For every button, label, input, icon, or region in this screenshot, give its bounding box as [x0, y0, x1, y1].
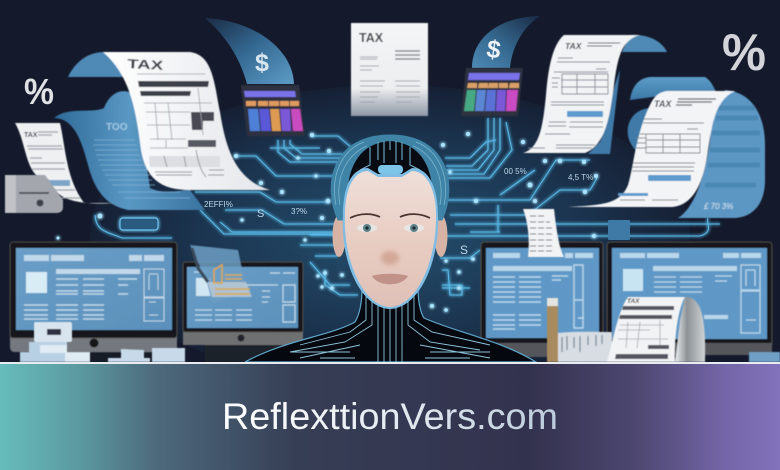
paper heading: TAX [654, 99, 672, 109]
circuit network [95, 118, 720, 295]
monitor camera dot [238, 334, 244, 342]
monitor frame [10, 242, 177, 338]
monitor base [607, 343, 772, 355]
top box [34, 322, 72, 342]
eye left [357, 224, 377, 232]
small blue chip [608, 220, 630, 240]
nose shadow [381, 251, 399, 265]
blue tail [622, 35, 667, 52]
lower boxes [20, 342, 89, 362]
ear left [332, 215, 346, 257]
document details [27, 132, 80, 198]
monitor content [24, 255, 164, 293]
ribbon shaded lines [93, 140, 190, 198]
receipt heading: TAX [627, 298, 640, 305]
calculator top keys [246, 101, 299, 106]
percent symbol left: % [24, 71, 54, 112]
right blue swoosh [472, 16, 540, 68]
right calculator [461, 68, 523, 116]
right lower scroll [568, 77, 765, 218]
paper heading: TAX [565, 41, 583, 51]
rear body bands [705, 108, 760, 185]
dollar icon left: $ [255, 49, 269, 77]
small circuit labels: 00 5% [504, 167, 527, 176]
monitor two [183, 262, 303, 362]
left floating report [190, 245, 252, 303]
monitor content [493, 253, 593, 271]
lips [372, 274, 408, 284]
small circuit labels: S [257, 208, 264, 220]
left calculator [241, 85, 305, 136]
circuit hair cap [331, 135, 449, 220]
face skin [345, 171, 436, 307]
calculator display [468, 73, 520, 80]
receipt lines [530, 216, 553, 251]
document lines [360, 57, 420, 102]
blue rear body [678, 90, 765, 218]
crumpled paper [558, 332, 612, 362]
paper roll shadow [675, 297, 705, 362]
left blue swoosh [205, 18, 294, 84]
monitor frame [607, 242, 772, 347]
paper table [620, 119, 704, 200]
small circuit labels: 4,5 T% [568, 173, 593, 182]
tan post [547, 298, 558, 362]
blue top tail [68, 52, 127, 77]
monitor screen [486, 248, 599, 338]
calculator key columns [248, 109, 260, 131]
small left tax document [15, 123, 114, 204]
monitor screen [187, 267, 298, 328]
monitor base [481, 343, 603, 357]
document heading: TAX [359, 31, 384, 45]
calculator key columns [464, 90, 476, 111]
paper blue button [567, 111, 603, 117]
hair cap side stripes [334, 142, 446, 205]
hair cap dark inner [348, 141, 432, 205]
calculator top keys [467, 83, 519, 88]
small grey device [5, 175, 63, 213]
paper heading lines [676, 99, 716, 105]
receipt bars [615, 306, 674, 359]
monitor chin [183, 328, 303, 345]
eyebrows [350, 214, 430, 218]
bottom divider line [0, 362, 780, 364]
monitor frame [481, 242, 603, 347]
document sheet [15, 123, 114, 204]
white paper [103, 52, 270, 190]
box display [47, 329, 61, 335]
mid floating receipt [523, 209, 564, 257]
blue rear top [630, 77, 716, 100]
monitor camera dot [90, 338, 98, 348]
character head and neck [245, 135, 536, 362]
monitor screen [16, 248, 172, 330]
percent symbol right: % [722, 24, 766, 82]
ear right [434, 215, 448, 257]
face glow outline [343, 168, 438, 309]
paper footer [149, 156, 220, 167]
foreground receipt roll [547, 297, 780, 362]
white paper [523, 35, 640, 153]
neck and shoulders [245, 288, 536, 362]
neck circuit traces [290, 295, 490, 362]
paper table lines [137, 74, 212, 148]
calculator display [244, 91, 296, 97]
small circuit labels: 2EFFI% [204, 200, 233, 209]
paper bars [138, 81, 216, 147]
eye right [404, 224, 424, 232]
small circuit labels: S [460, 243, 468, 257]
paper heading: TAX [127, 56, 164, 73]
monitor frame [183, 262, 303, 332]
paper heading lines [587, 43, 620, 46]
stacked boxes left [20, 322, 185, 362]
monitor content [620, 253, 761, 319]
small chip outline under left scroll [120, 218, 158, 230]
blue fold [588, 70, 660, 154]
paper blue button [648, 175, 691, 181]
monitor content [196, 278, 211, 296]
footer site name: ReflexttionVers.com [222, 396, 558, 437]
dollar icon right: $ [485, 35, 503, 65]
blue corner box [749, 352, 780, 362]
monitor screen [612, 248, 767, 339]
document heading: TAX [24, 132, 38, 139]
small boxes [108, 348, 185, 362]
small circuit labels: 3?% [291, 207, 307, 216]
monitor four [607, 242, 772, 355]
monitor three [481, 242, 603, 357]
small circuit labels [204, 167, 593, 257]
monitor chin [10, 330, 177, 352]
circuit glow nodes [56, 132, 598, 312]
left tax scroll [54, 52, 270, 210]
receipt lines [618, 320, 668, 348]
footer gradient band [0, 364, 780, 470]
blue rear ribbon [54, 91, 205, 210]
monitor stand [55, 352, 155, 362]
monitor one [10, 242, 177, 362]
calculator body [461, 68, 523, 116]
receipt sheet [607, 297, 685, 362]
right upper scroll [523, 35, 667, 154]
calculator body [241, 85, 305, 136]
hair cap center traces [360, 141, 420, 170]
rear label: £ 70 3% [703, 202, 733, 211]
center top tax document [351, 23, 428, 116]
white paper [568, 91, 735, 207]
paper table [528, 58, 610, 148]
monitor base [205, 345, 290, 362]
forehead chip [378, 165, 403, 174]
ribbon label: TOO [106, 122, 128, 133]
